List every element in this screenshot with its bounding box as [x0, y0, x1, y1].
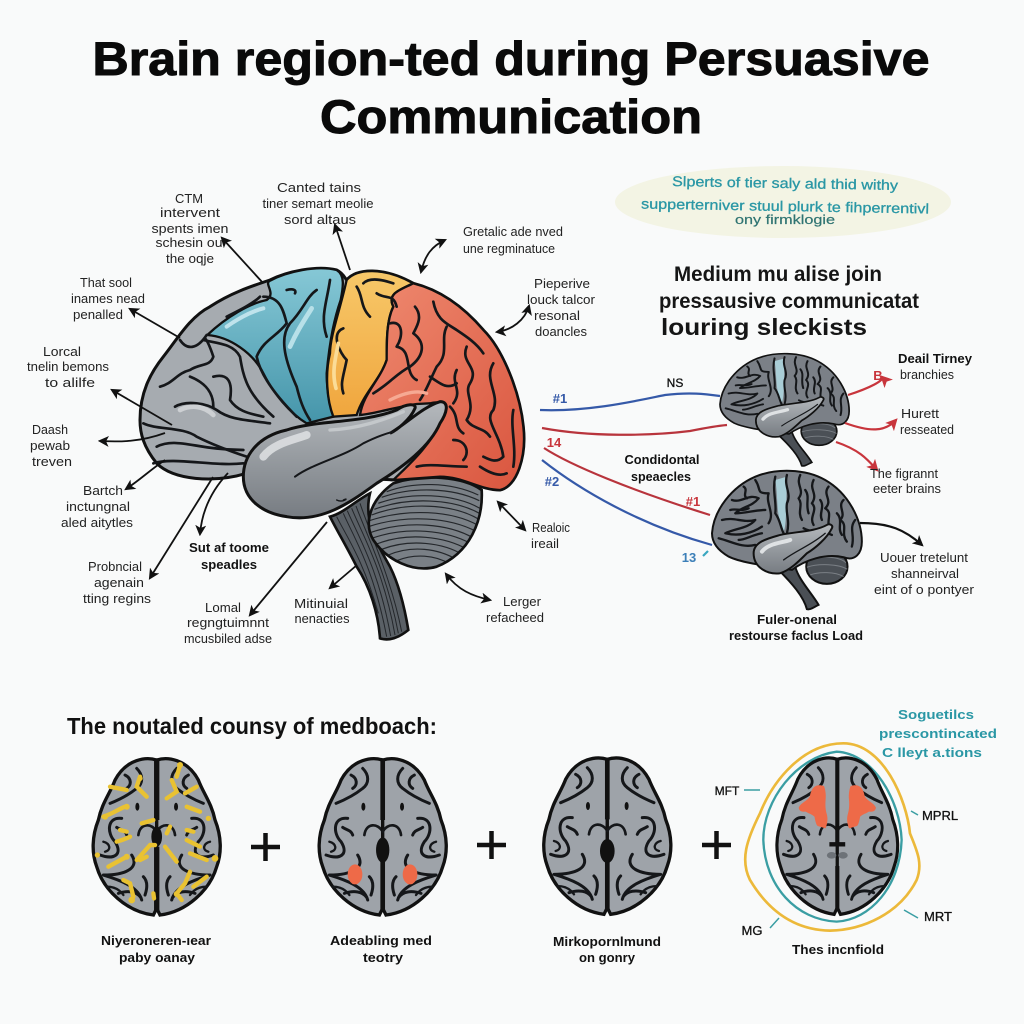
ring labels: MG [742, 923, 762, 938]
connecting lines and numbers [540, 377, 922, 556]
activation: right [847, 785, 876, 828]
label: bottom: regngtuimnnt [187, 615, 269, 630]
label: cerebellum right [531, 520, 570, 551]
teal label: Soguetilcs [898, 707, 974, 722]
callout: teal ellipse: ony firmklogie [735, 212, 835, 227]
label: stem: nenacties [294, 611, 350, 626]
label: fuler: Fuler-onenal [757, 612, 837, 627]
label: top centre: Canted tains [277, 180, 362, 195]
label: conditional: Condidontal [624, 452, 700, 467]
activation: left [799, 785, 827, 828]
gyri lines [143, 279, 514, 475]
top-down brain 2: red spots [319, 758, 446, 915]
label: figrannt [870, 466, 941, 496]
label: dead tirney: B [873, 368, 883, 383]
label: fuler: restourse faclus Load [729, 628, 863, 643]
heading: lower section: The noutaled counsy of medboach: [67, 713, 437, 739]
label: dead tirney: Deail Tirney [898, 351, 973, 366]
teal label: C lleyt a.tions [882, 745, 982, 760]
label: left middle: tnelin bemons [27, 359, 109, 374]
plus 3 [702, 831, 731, 859]
caption 4: Thes incnfiold [792, 942, 884, 957]
label: left upper: inames nead [71, 291, 145, 306]
label: uouer [874, 550, 975, 597]
plus 1 [251, 833, 280, 861]
ring labels: MRT [924, 909, 952, 924]
title: Communication [320, 90, 702, 143]
side brain top [720, 354, 849, 466]
blue region [207, 268, 343, 423]
label: cerebellum right: ireail [531, 536, 559, 551]
labels around main brain, left top [152, 191, 228, 266]
labels around main brain, left top: the oqje [166, 251, 214, 266]
label: top centre: tiner semart meolie [262, 196, 374, 211]
caption 3: Mirkopornlmund [553, 934, 661, 949]
label: bold centre [189, 540, 269, 572]
line numbers: 14 [547, 435, 562, 450]
label: cerebellum lower: refacheed [486, 610, 544, 625]
ring labels: MPRL [922, 808, 958, 823]
top-down brain 1: yellow network [93, 758, 220, 915]
label: left upper: penalled [73, 307, 123, 322]
label: bottom left: Probncial [88, 559, 142, 574]
heading: medium: pressausive communicatat [659, 290, 919, 313]
label: top right of brain: Gretalic ade nved [463, 224, 563, 239]
label: figrannt: eeter brains [873, 481, 941, 496]
label: right of brain: doancles [535, 324, 587, 339]
label: right of brain: louck talcor [527, 292, 596, 307]
label: right of brain [527, 276, 596, 339]
main brain illustration [140, 268, 524, 639]
caption 2: teotry [363, 950, 404, 965]
labels around main brain, left top: intervent [160, 205, 220, 220]
labels around main brain, left top: schesin ou [156, 235, 222, 250]
label: top right of brain: une regminatuce [463, 241, 555, 256]
highlights [180, 308, 427, 415]
plus 2 [477, 831, 506, 859]
label: hurett: Hurett [901, 406, 939, 421]
caption 2 [330, 933, 432, 965]
label: figrannt: The figrannt [870, 466, 938, 481]
line numbers: #2 [545, 474, 559, 489]
label: right of brain: resonal [534, 308, 580, 323]
label: bold centre: speadles [201, 557, 257, 572]
label: dead tirney [873, 351, 973, 383]
side brain bottom [712, 471, 862, 609]
callout: teal ellipse: supperterniver stuul plurk te fihperrentivl [641, 195, 929, 217]
heading: medium: Medium mu alise join [674, 263, 882, 286]
line numbers [545, 376, 700, 565]
top-down brain 3: plain [544, 758, 671, 914]
label: uouer: Uouer tretelunt [880, 550, 968, 565]
label: bottom: Lomal [205, 600, 241, 615]
label: conditional [624, 452, 700, 484]
label: hurett: resseated [900, 422, 954, 437]
label: top centre: sord altaus [284, 212, 357, 227]
label: hurett [900, 406, 954, 437]
line numbers: 13 [682, 550, 696, 565]
label: left: Daash [32, 422, 68, 437]
label: uouer: shanneirval [891, 566, 959, 581]
label: dead tirney: branchies [900, 367, 954, 382]
temporal lobe [243, 402, 446, 518]
title: Brain region-ted during Persuasive [92, 32, 929, 85]
caption 3: on gonry [579, 950, 636, 965]
labels around main brain, left top: CTM [175, 191, 203, 206]
label: fuler [729, 612, 863, 643]
label: left [30, 422, 72, 469]
yellow region [327, 271, 413, 417]
line numbers: #1 [686, 494, 700, 509]
caption 3 [553, 934, 661, 965]
caption 2: Adeabling med [330, 933, 432, 948]
label: left upper: That sool [80, 275, 132, 290]
label: bottom left [83, 559, 152, 606]
caption 1: paby oanay [119, 950, 196, 965]
label: top right of brain [463, 224, 563, 256]
ring: teal [763, 752, 902, 922]
label: cerebellum lower: Lerger [503, 594, 542, 609]
label: stem: Mitinuial [294, 596, 348, 611]
label: left lower: aled aitytles [61, 515, 134, 530]
label: conditional: speaecles [631, 469, 691, 484]
teal label: prescontincated [879, 726, 997, 741]
leader ticks [744, 790, 918, 928]
label: cerebellum right: Realoic [532, 520, 570, 535]
heading: medium: louring sleckists [661, 314, 867, 340]
label: right of brain: Pieperive [534, 276, 590, 291]
title [92, 32, 929, 143]
heading: medium [659, 263, 919, 340]
caption 1: Niyeroneren-ıear [101, 933, 211, 948]
label: bold centre: Sut af toome [189, 540, 269, 555]
ring labels [715, 784, 958, 938]
red region [360, 283, 524, 490]
label: bottom left: tting regins [83, 591, 152, 606]
brain [777, 758, 898, 914]
label: bottom left: agenain [94, 575, 144, 590]
label: top centre [262, 180, 374, 227]
label: uouer: eint of o pontyer [874, 582, 975, 597]
caption 1 [101, 933, 211, 965]
label: left middle [27, 344, 109, 390]
labels around main brain, left top: spents imen [152, 221, 228, 236]
label: bottom: mcusbiled adse [184, 631, 272, 646]
annotation arrows around main brain [100, 225, 529, 615]
label: left lower [61, 483, 134, 530]
ring labels: MFT [715, 784, 740, 798]
cerebrum grey base [140, 268, 524, 490]
label: left lower: Bartch [83, 483, 123, 498]
label: left middle: Lorcal [43, 344, 81, 359]
label: bottom [184, 600, 272, 646]
line numbers: NS [667, 376, 683, 390]
label: left upper [71, 275, 145, 322]
label: left middle: to alilfe [45, 375, 95, 390]
callout: teal ellipse: Slperts of tier saly ald thid withy [672, 173, 898, 193]
label: left: treven [32, 454, 72, 469]
label: left: pewab [30, 438, 70, 453]
ring: yellow [745, 743, 919, 931]
line numbers: #1 [553, 391, 567, 406]
callout: teal ellipse [615, 166, 951, 238]
label: stem [294, 596, 350, 626]
label: left lower: inctungnal [66, 499, 130, 514]
label: cerebellum lower [486, 594, 544, 625]
top-down brain 4 with rings [745, 743, 919, 931]
teal label [879, 707, 997, 760]
brain stem [330, 493, 408, 639]
cerebellum [368, 478, 482, 568]
